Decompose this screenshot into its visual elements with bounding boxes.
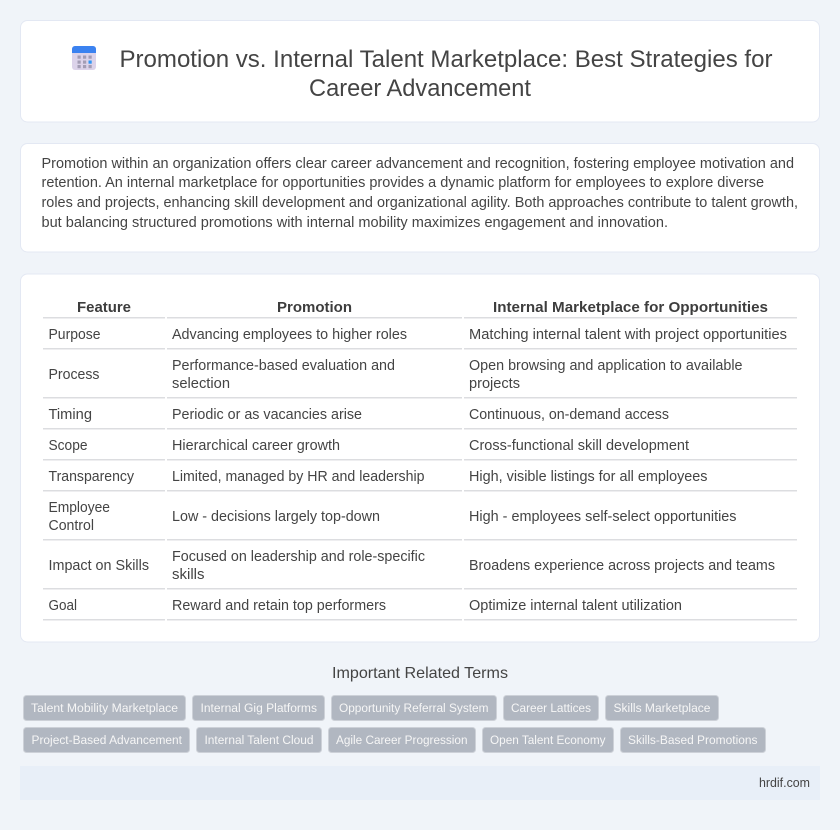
- row: employee control: Employee: [48, 500, 110, 516]
- tags: related terms: Skills Marketplace: [614, 701, 711, 715]
- icon: calendar: [72, 46, 96, 70]
- row: timing: Timing: [48, 407, 92, 423]
- footer: [20, 766, 820, 800]
- row: scope: Cross-functional skill development: [469, 438, 689, 454]
- row: process: Process: [48, 367, 100, 383]
- row: impact on skills: [48, 549, 775, 583]
- row: employee control: Control: [48, 518, 94, 534]
- row: transparency: [48, 469, 708, 485]
- title: Career Advancement: [309, 75, 531, 102]
- row: impact on skills: Focused on leadership and role-specific: [172, 549, 425, 565]
- row: goal: Goal: [48, 598, 77, 614]
- row: scope: Scope: [48, 438, 88, 454]
- row: process: Open browsing and application to available: [469, 358, 743, 374]
- heading: important related terms: Important Related Terms: [332, 665, 508, 682]
- row: impact on skills: skills: [172, 567, 204, 583]
- tags: related terms: Internal Talent Cloud: [204, 733, 314, 747]
- row: process: selection: [172, 376, 230, 392]
- row: transparency: High, visible listings for all employees: [469, 469, 708, 485]
- tags: related terms: Talent Mobility Marketplace: [31, 701, 178, 715]
- row: process: projects: [469, 376, 520, 392]
- row: purpose: [48, 327, 787, 343]
- tags: related terms: Career Lattices: [511, 701, 591, 715]
- row: timing: [48, 407, 669, 423]
- table header: Promotion: [277, 300, 352, 316]
- row: purpose: Purpose: [48, 327, 101, 343]
- row: process: [48, 358, 743, 392]
- tags: related terms: Opportunity Referral System: [339, 701, 488, 715]
- panel: introduction text: roles and projects, enhancing skill development and organizational agility. Both approaches contribute to talent growth,: [42, 195, 798, 211]
- row: transparency: Limited, managed by HR and leadership: [172, 469, 425, 485]
- row: scope: [48, 438, 689, 454]
- row: purpose: Advancing employees to higher roles: [172, 327, 407, 343]
- row: purpose: Matching internal talent with project opportunities: [469, 327, 787, 343]
- row: impact on skills: Impact on Skills: [48, 558, 149, 574]
- table header: Internal Marketplace for Opportunities: [493, 300, 768, 316]
- row: scope: Hierarchical career growth: [172, 438, 340, 454]
- row: employee control: [48, 500, 736, 534]
- row: goal: Reward and retain top performers: [172, 598, 386, 614]
- tags: related terms: Project-Based Advancement: [32, 733, 183, 747]
- title: [120, 46, 772, 102]
- tags: related terms: [24, 696, 766, 752]
- row: goal: [48, 598, 682, 614]
- row: process: Performance-based evaluation and: [172, 358, 395, 374]
- title: Promotion vs. Internal Talent Marketplace: Best Strategies for: [120, 46, 772, 73]
- panel: comparison table: [20, 274, 820, 642]
- tags: related terms: Skills-Based Promotions: [628, 733, 758, 747]
- tags: related terms: Internal Gig Platforms: [200, 701, 317, 715]
- panel: header: [20, 20, 820, 122]
- tags: related terms: Agile Career Progression: [336, 733, 468, 747]
- panel: introduction text: [20, 144, 820, 252]
- row: employee control: High - employees self-select opportunities: [469, 509, 736, 525]
- row: employee control: Low - decisions largely top-down: [172, 509, 380, 525]
- table header: Feature: [77, 300, 131, 316]
- tags: related terms: Open Talent Economy: [490, 733, 606, 747]
- panel: introduction text: retention. An internal marketplace for opportunities provides a dynamic platform for employees to explore diverse: [42, 175, 764, 191]
- row: timing: Periodic or as vacancies arise: [172, 407, 362, 423]
- panel: introduction text: Promotion within an organization offers clear career advancement and recognition, fostering employee motivation and: [42, 156, 794, 172]
- footer: hrdif.com: [759, 776, 810, 790]
- table header: [77, 300, 768, 316]
- row: transparency: Transparency: [48, 469, 135, 485]
- row: timing: Continuous, on-demand access: [469, 407, 669, 423]
- row: impact on skills: Broadens experience across projects and teams: [469, 558, 775, 574]
- row: goal: Optimize internal talent utilization: [469, 598, 682, 614]
- panel: introduction text: but balancing structured promotions with internal mobility maximizes engagement and innovation.: [42, 215, 668, 231]
